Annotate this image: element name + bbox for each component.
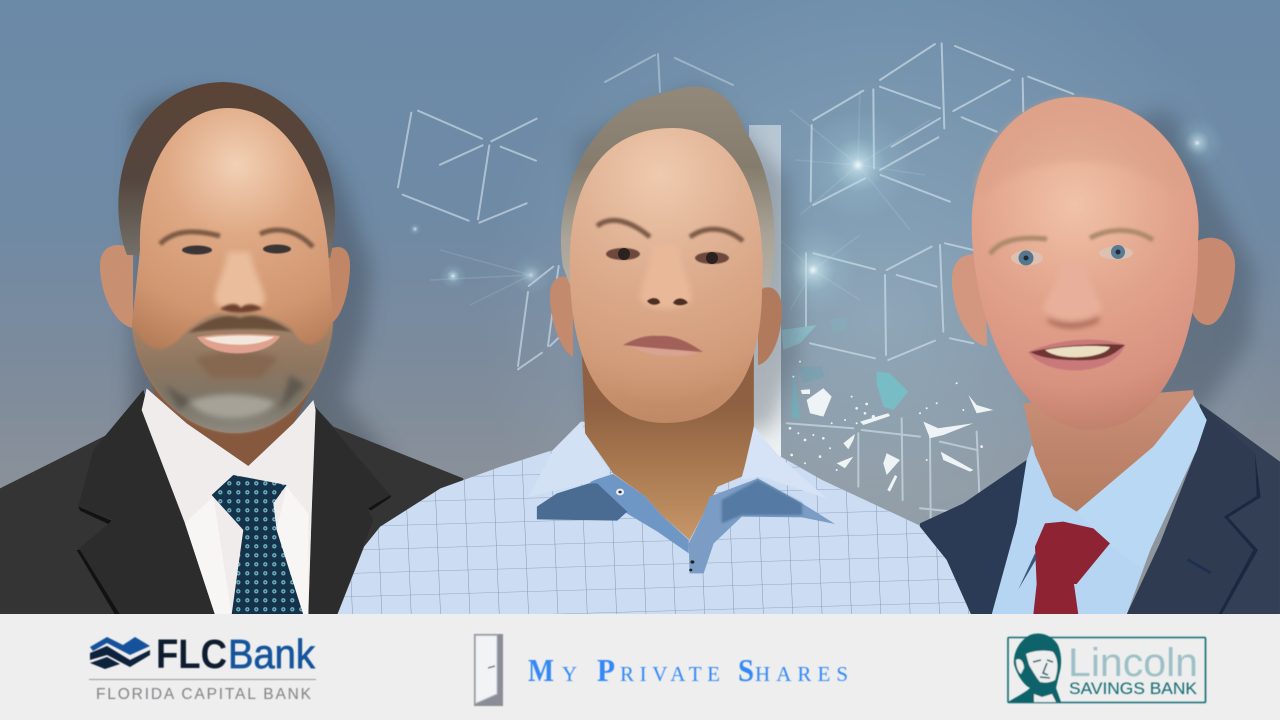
icon: open door (474, 634, 503, 706)
jacket, shirt, tie (920, 390, 1280, 615)
logo: FLC Bank: FLORIDA CAPITAL BANK (96, 686, 312, 703)
person 3: right, navy suit (920, 97, 1280, 615)
jacket, shirt, tie (0, 380, 463, 615)
person 2: centre, blue check shirt (338, 85, 971, 614)
collars (529, 422, 610, 497)
face (132, 108, 333, 433)
icon: chevrons (90, 637, 150, 669)
glass shards (782, 317, 993, 492)
tie (212, 475, 303, 615)
wordmark: Lincoln (1068, 641, 1198, 685)
logo: My Private Shares (474, 634, 848, 706)
jacket (920, 460, 1040, 615)
wordmark: P (597, 652, 615, 688)
wordmark: M (528, 652, 554, 688)
sparkles (409, 90, 1223, 315)
shirt (338, 333, 971, 614)
nose (640, 245, 692, 309)
ears (550, 277, 573, 357)
shirt (992, 395, 1207, 615)
tie (1033, 522, 1110, 615)
hair (118, 82, 335, 258)
hair (561, 86, 774, 287)
ears (952, 254, 987, 346)
eyes (606, 248, 729, 264)
eyes (1011, 245, 1133, 266)
wireframes top centre (605, 54, 733, 92)
jacket (0, 390, 463, 615)
neck (581, 333, 754, 540)
smile (1028, 340, 1125, 370)
chin shadow (610, 385, 725, 411)
brows (990, 230, 1153, 254)
wordmark: Y (562, 662, 577, 686)
buttons (616, 489, 624, 495)
beard (132, 313, 333, 433)
brows and eyes (160, 230, 313, 254)
face (570, 128, 763, 423)
neck (150, 380, 317, 466)
wordmark (528, 652, 848, 688)
background graphic: wireframes, sparkles, glass shards (398, 43, 1223, 520)
neck (1023, 390, 1193, 512)
shirt (142, 388, 316, 615)
mouth (197, 334, 280, 353)
wireframes right (787, 43, 1073, 520)
person 1: left, dark suit (0, 82, 463, 615)
ears (100, 245, 133, 328)
beard highlights (165, 352, 305, 418)
scalp tone (973, 97, 1190, 195)
wordmark: RIVATE (620, 662, 720, 686)
frame (1008, 638, 1206, 702)
logo: FLC Bank (89, 631, 316, 703)
head (972, 97, 1199, 430)
logo: Lincoln Savings Bank: SAVINGS BANK (1069, 679, 1198, 698)
icon: Lincoln portrait (1008, 633, 1061, 702)
wordmark: S (738, 652, 754, 688)
drop shadow (130, 92, 400, 470)
brows (597, 220, 743, 241)
wordmark: HARES (755, 662, 848, 686)
logo: Lincoln Savings Bank (1008, 633, 1206, 702)
logo: FLC Bank: Bank (228, 631, 315, 677)
wireframes left (398, 111, 563, 369)
nose (1043, 262, 1102, 328)
drop shadow (575, 85, 798, 430)
wordmark: FLC (156, 631, 227, 677)
moustache (188, 316, 292, 333)
white vertical bar (749, 125, 781, 470)
mouth (623, 336, 703, 356)
drop shadow (1010, 110, 1255, 410)
placket and inner collar (589, 474, 689, 553)
footer logo band (0, 614, 1280, 720)
nose (215, 252, 265, 311)
